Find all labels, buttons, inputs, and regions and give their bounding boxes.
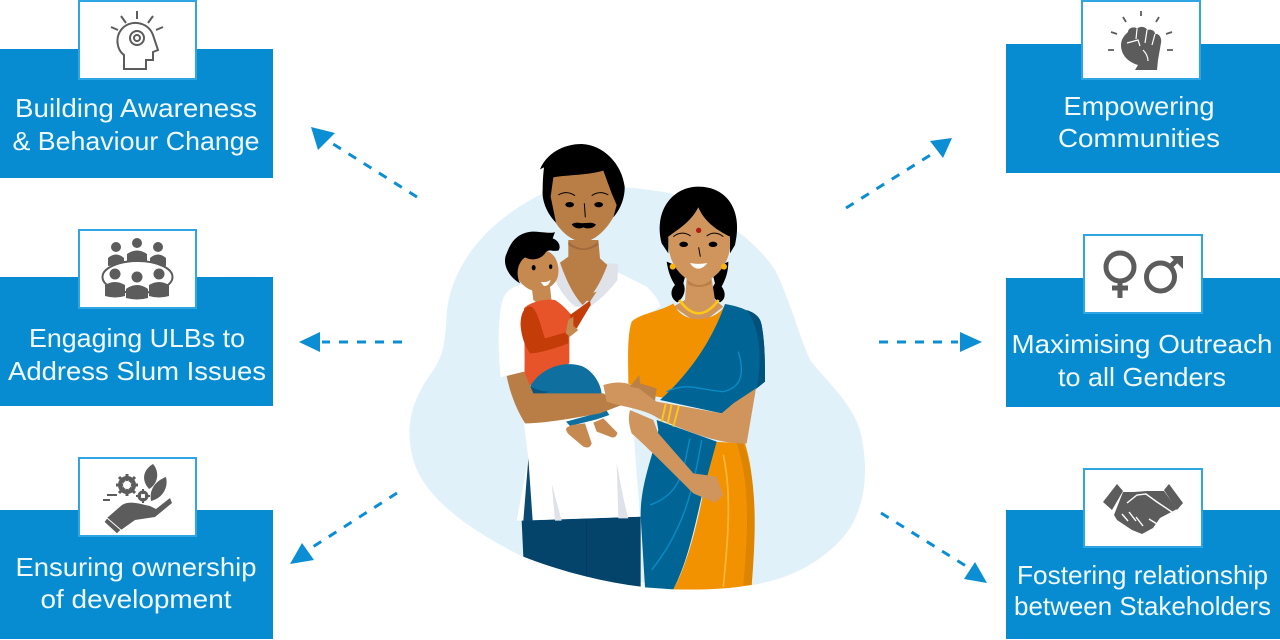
panel: maximising outreach — [1006, 235, 1280, 407]
woman — [603, 187, 765, 590]
heading: building awareness: Building Awareness — [15, 93, 257, 123]
icon: handshake — [1103, 484, 1183, 534]
subheading: all genders: to all Genders — [1058, 362, 1226, 392]
subheading: of development: of development — [40, 584, 232, 614]
arrow: to empowering communities — [846, 138, 952, 208]
arrow: to fostering relationship — [881, 513, 987, 583]
icon: meeting around table — [102, 238, 172, 300]
child — [505, 232, 617, 447]
man — [499, 144, 660, 587]
arrow: to building awareness — [311, 127, 417, 197]
family figures — [499, 144, 765, 590]
icon: raised fist — [1108, 11, 1173, 70]
panel: ensuring ownership — [0, 458, 273, 639]
heading: ensuring ownership: Ensuring ownership — [16, 552, 256, 582]
heading: fostering relationship: Fostering relationship — [1017, 560, 1268, 590]
subheading: behaviour change: & Behaviour Change — [12, 126, 260, 156]
illustration: family on blob — [410, 144, 865, 590]
panel: empowering communities — [1006, 1, 1280, 173]
heading: empowering: Empowering — [1064, 91, 1214, 121]
panel: building awareness — [0, 1, 273, 178]
icon: head with target — [111, 11, 163, 69]
arrow: to ensuring ownership — [290, 493, 397, 564]
heading: engaging ULBs: Engaging ULBs to — [29, 323, 245, 353]
heading: maximising outreach: Maximising Outreach — [1012, 329, 1272, 359]
icon: gender symbols — [1106, 253, 1183, 298]
man's arm — [507, 372, 622, 423]
background blob — [410, 186, 865, 587]
subheading: communities: Communities — [1058, 123, 1220, 153]
subheading: between stakeholders: between Stakeholders — [1014, 591, 1271, 621]
icon: hand with gears and leaves — [103, 464, 172, 534]
panel: fostering relationship — [1006, 469, 1280, 639]
panel: engaging ULBs — [0, 230, 273, 406]
arrow: to engaging ULBs — [299, 332, 402, 352]
subheading: slum issues: Address Slum Issues — [8, 356, 266, 386]
arrow: to maximising outreach — [879, 332, 982, 352]
